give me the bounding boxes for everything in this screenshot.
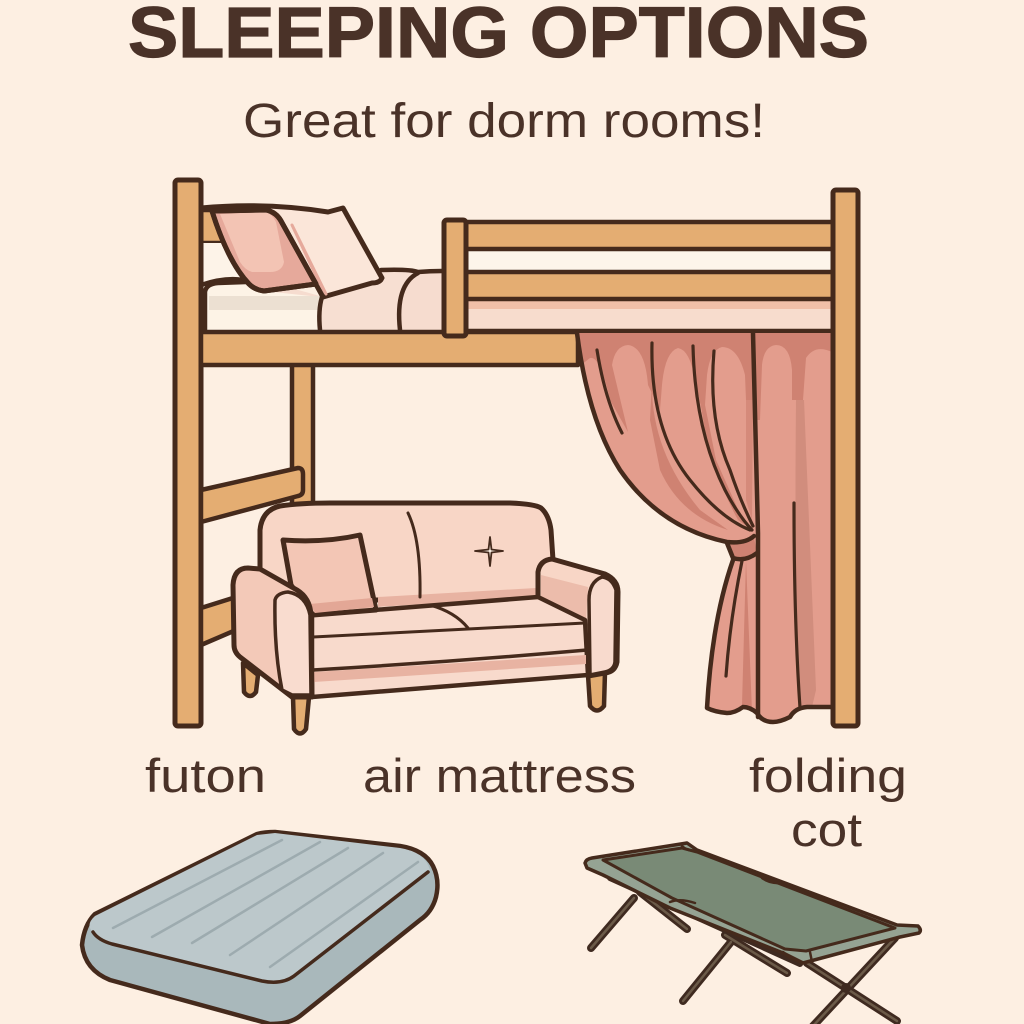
guard rails [462, 222, 834, 299]
left post [175, 180, 201, 726]
support post [292, 364, 313, 506]
label: futon: futon [145, 749, 266, 802]
label: folding cot: folding [749, 749, 907, 802]
sofa legs [243, 663, 605, 734]
left arm [233, 568, 312, 697]
ladder rungs [201, 468, 303, 645]
mattress ridges [113, 840, 418, 967]
right arm [538, 559, 618, 676]
sofa [233, 503, 618, 734]
guard post [444, 220, 466, 336]
main bed rail [201, 332, 578, 365]
curtain [577, 333, 832, 722]
pillow front [212, 210, 316, 291]
air mattress [82, 832, 437, 1024]
sparkle [475, 537, 503, 566]
seat [312, 597, 588, 697]
sofa back [260, 503, 553, 600]
cot frame [585, 843, 920, 963]
sofa pillow [283, 535, 376, 615]
mattress top [89, 833, 430, 982]
folding cot [585, 843, 920, 1024]
right post [833, 190, 858, 726]
cot fabric [603, 848, 895, 951]
back rail behind pillows [201, 210, 232, 243]
label: folding cot [749, 749, 907, 856]
subtitle: Great for dorm rooms! [243, 95, 765, 148]
loft bed illustration [175, 180, 858, 734]
pillow back [201, 206, 382, 297]
label: folding cot: cot [791, 803, 862, 856]
bedding [201, 243, 834, 330]
cot legs [591, 878, 897, 1024]
label: air mattress: air mattress [363, 749, 636, 802]
